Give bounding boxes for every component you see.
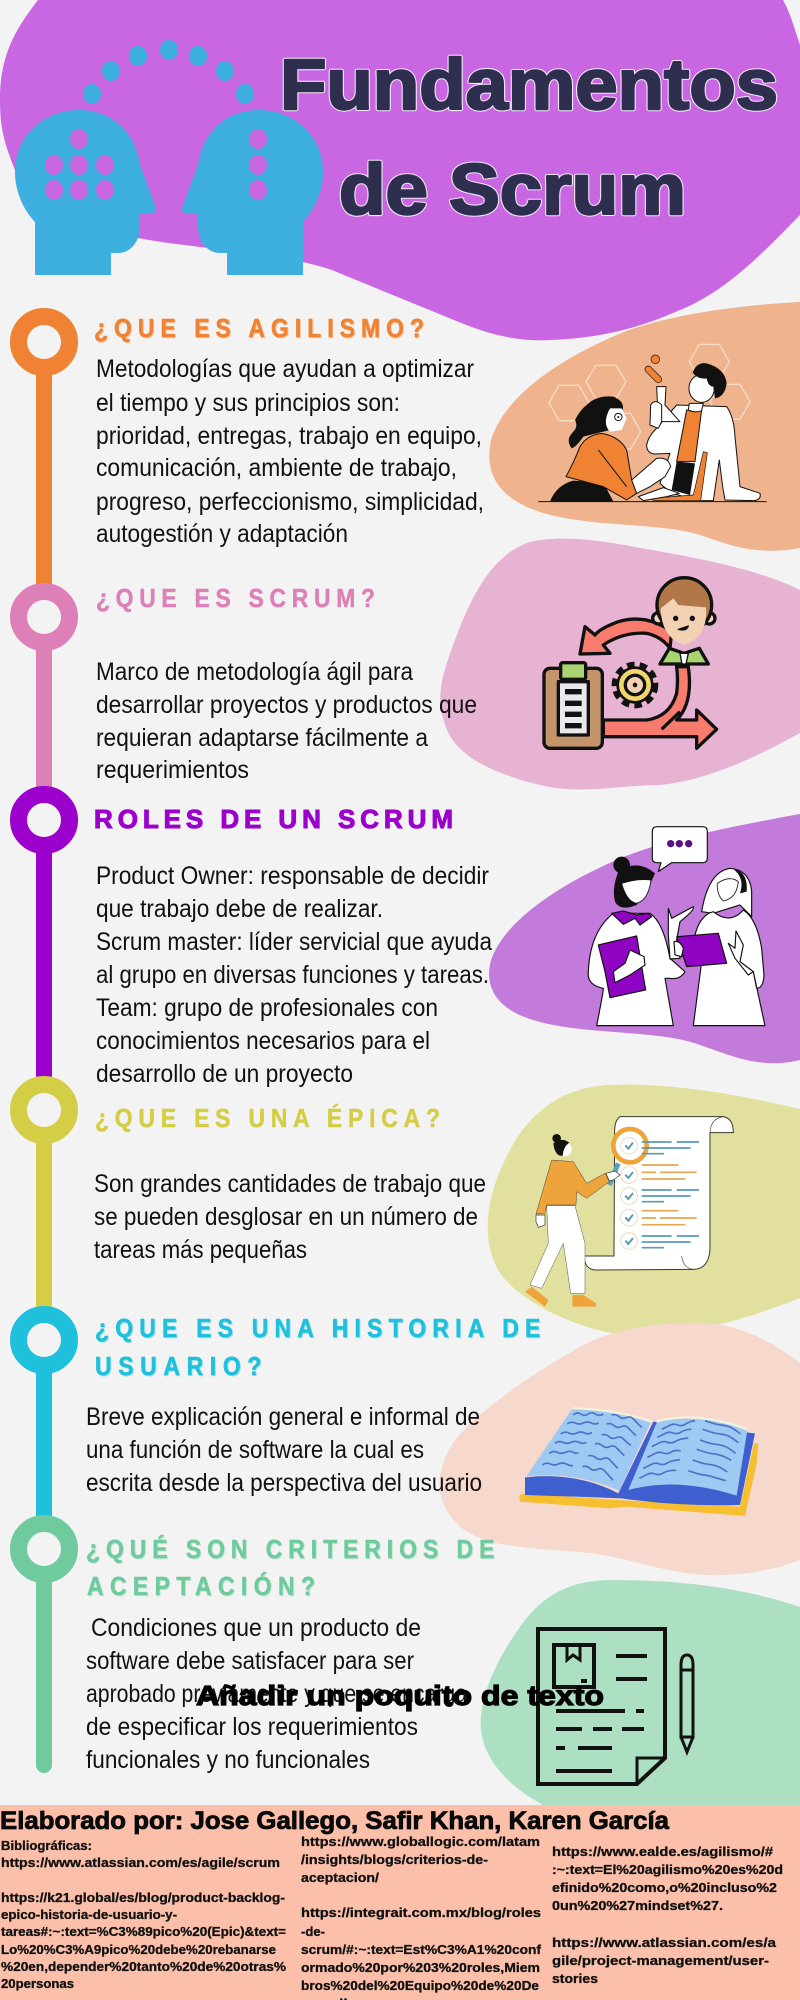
references column 2: -de- <box>301 1925 325 1939</box>
text block: agilismo: autogestión y adaptación <box>96 520 348 548</box>
text block: criterios: aprobado previamente y que se encarga <box>86 1680 467 1708</box>
references column 2 <box>301 1835 542 2000</box>
footer title: Elaborado por: Jose Gallego, Safir Khan, Karen García <box>0 1807 670 1835</box>
text block: historia de usuario: escrita desde la perspectiva del usuario <box>86 1469 482 1497</box>
references column 2: ormado%20por%203%20roles,Miem <box>301 1961 540 1975</box>
panel blob: epica <box>488 1085 800 1336</box>
text block: roles: conocimientos necesarios para el <box>96 1027 430 1055</box>
references column 3: :~:text=El%20agilismo%20es%20d <box>552 1863 783 1877</box>
heading: que es una historia de usuario: ¿QUE ES UNA HISTORIA DE <box>95 1315 540 1343</box>
references column 3: https://www.atlassian.com/es/a <box>552 1936 777 1950</box>
heading: que es una epica: ¿QUE ES UNA ÉPICA? <box>95 1104 440 1133</box>
references column 1: Lo%20%C3%A9pico%20debe%20rebanarse <box>1 1943 276 1957</box>
title <box>280 46 778 230</box>
placeholder text overlay: Añadir un poquito de texto <box>196 1680 604 1711</box>
panel blob: roles <box>489 814 800 1063</box>
text block: epica: se pueden desglosar en un número de <box>94 1203 478 1231</box>
references column 1: Bibliográficas: <box>1 1839 92 1853</box>
text block: roles: Product Owner: responsable de decidir <box>96 862 489 890</box>
illustration: scientists <box>538 344 767 502</box>
references column 2: bros%20del%20Equipo%20de%20De <box>301 1979 539 1993</box>
references column 1 <box>1 1839 286 1991</box>
references column 2: https://www.globallogic.com/latam <box>301 1835 540 1849</box>
panel blob: criterios <box>481 1580 800 1806</box>
heading: que es una historia de usuario: USUARIO? <box>95 1353 261 1381</box>
text block: scrum: desarrollar proyectos y productos que <box>96 691 477 719</box>
illustration: two women talking <box>588 827 765 1026</box>
text block: scrum <box>96 658 477 784</box>
timeline <box>18 316 70 1765</box>
text block: criterios <box>86 1614 467 1774</box>
references column 3 <box>552 1845 783 1986</box>
text block: agilismo: prioridad, entregas, trabajo en equipo, <box>96 422 482 450</box>
text block: roles: Team: grupo de profesionales con <box>96 994 438 1022</box>
references column 3: 0un%20%27mindset%27. <box>552 1899 723 1913</box>
text block: roles: al grupo en diversas funciones y tareas. <box>96 961 489 989</box>
heading: que son criterios de aceptacion: ACEPTACIÓN? <box>87 1572 315 1601</box>
references column 1: %20en,depender%20tanto%20de%20otras% <box>1 1960 286 1974</box>
text block: historia de usuario: Breve explicación general e informal de <box>86 1403 480 1431</box>
heading: roles de un scrum: ROLES DE UN SCRUM <box>94 804 453 834</box>
text block: agilismo: comunicación, ambiente de trabajo, <box>96 454 457 482</box>
references column 2: /insights/blogs/criterios-de- <box>301 1853 488 1867</box>
text block: agilismo <box>96 355 484 548</box>
text block: criterios: funcionales y no funcionales <box>86 1746 370 1774</box>
panel blob: agilismo <box>489 302 800 551</box>
panel blob: scrum <box>440 539 800 789</box>
text block: criterios: software debe satisfacer para ser <box>86 1647 414 1675</box>
text block: agilismo: Metodologías que ayudan a optimizar <box>96 355 474 383</box>
text block: historia de usuario: una función de software la cual es <box>86 1436 424 1464</box>
heading: que son criterios de aceptacion <box>86 1535 494 1601</box>
icon: two heads sharing ideas <box>15 40 323 275</box>
references column 3: stories <box>552 1972 598 1986</box>
text block: agilismo: el tiempo y sus principios son: <box>96 389 400 417</box>
text block: agilismo: progreso, perfeccionismo, simplicidad, <box>96 488 484 516</box>
text block: criterios: Condiciones que un producto de <box>91 1614 421 1642</box>
illustration: agile cycle with person, gear and clipboard <box>544 578 717 748</box>
references column 1: 20personas <box>1 1977 74 1991</box>
illustration: open book <box>519 1409 758 1516</box>
references column 3: efinido%20como,o%20incluso%2 <box>552 1881 777 1895</box>
panel blob: historia de usuario <box>439 1323 800 1575</box>
title: de Scrum <box>339 151 686 230</box>
title: de Scrum <box>339 151 686 230</box>
references column 2: scrum/#:~:text=Est%C3%A1%20conf <box>301 1943 542 1957</box>
title: Fundamentos <box>280 46 778 125</box>
text block: scrum: requerimientos <box>96 756 249 784</box>
header blob <box>0 0 800 340</box>
text block: scrum: requieran adaptarse fácilmente a <box>96 724 428 752</box>
text block: roles: Scrum master: líder servicial que ayuda <box>96 928 492 956</box>
illustration: person inspecting checklist scroll <box>525 1117 733 1307</box>
text block: epica: Son grandes cantidades de trabajo que <box>94 1170 486 1198</box>
text block: roles: desarrollo de un proyecto <box>96 1060 353 1088</box>
references column 2: https://integrait.com.mx/blog/roles <box>301 1906 541 1920</box>
text block: scrum: Marco de metodología ágil para <box>96 658 413 686</box>
references column 3: gile/project-management/user- <box>552 1954 769 1968</box>
heading: que es agilismo: ¿QUE ES AGILISMO? <box>94 315 424 343</box>
heading: que es scrum: ¿QUE ES SCRUM? <box>96 585 375 613</box>
text block: epica: tareas más pequeñas <box>94 1236 307 1264</box>
title: Fundamentos <box>280 46 778 125</box>
text block: roles <box>96 862 492 1088</box>
references column 1: https://k21.global/es/blog/product-backlog- <box>1 1891 285 1905</box>
references column 1: tareas#:~:text=%C3%89pico%20(Epic)&text= <box>1 1925 286 1939</box>
footer panel <box>0 1805 800 2000</box>
references column 1: https://www.atlassian.com/es/agile/scrum <box>1 1856 280 1870</box>
heading: que son criterios de aceptacion: ¿QUÉ SON CRITERIOS DE <box>86 1535 494 1564</box>
references column 3: https://www.ealde.es/agilismo/# <box>552 1845 773 1859</box>
text block: epica <box>94 1170 486 1264</box>
heading: que es una historia de usuario <box>95 1315 540 1381</box>
text block: historia de usuario <box>86 1403 482 1497</box>
references column 1: epico-historia-de-usuario-y- <box>1 1908 177 1922</box>
icon: document and pencil <box>538 1629 693 1784</box>
text block: criterios: de especificar los requerimientos <box>86 1713 418 1741</box>
text block: roles: que trabajo debe de realizar. <box>96 895 383 923</box>
references column 2: aceptacion/ <box>301 1871 380 1885</box>
